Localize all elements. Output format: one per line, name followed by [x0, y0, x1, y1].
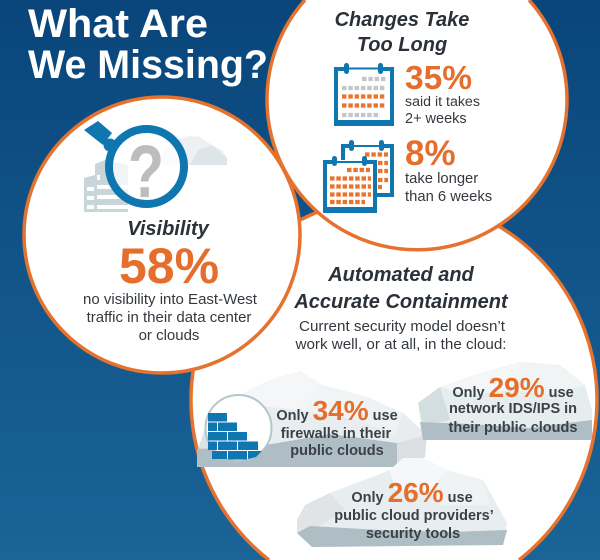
heading: automated: Automated and [327, 264, 475, 286]
text: security model: Current security model doesn’t [299, 318, 506, 335]
icon: magnifying glass [84, 121, 184, 214]
stat: 8 percent: than 6 weeks [405, 189, 492, 205]
text: provider tools stat: public cloud providers’ [334, 508, 494, 524]
heading: changes: Too Long [357, 34, 447, 56]
stat: 8 percent: take longer [405, 171, 478, 187]
icon: calendars [323, 140, 392, 213]
title: We Missing? [28, 43, 268, 87]
text: network IDS stat: network IDS/IPS in [449, 401, 577, 417]
heading: automated: Accurate Containment [293, 291, 509, 313]
text: visibility description: or clouds [139, 327, 199, 344]
cloud: firewalls [197, 371, 427, 467]
title [28, 2, 268, 87]
stat: 35 percent: said it takes [405, 94, 480, 110]
heading: automated [293, 264, 509, 313]
stat: 8 percent: 8% [405, 134, 456, 173]
cloud: provider tools [297, 458, 507, 547]
stat: 35 percent: 2+ weeks [405, 111, 467, 127]
text: security model [294, 318, 507, 353]
text: visibility description [83, 291, 258, 344]
text: firewalls stat: firewalls in their [281, 426, 392, 442]
text: firewalls stat: Only 34% use [276, 395, 398, 426]
stat: 8 percent [405, 134, 492, 205]
panel: changes take too long [267, 0, 567, 250]
text: firewalls stat: public clouds [290, 443, 384, 459]
stat: 35 percent [405, 60, 480, 127]
text: provider tools stat: security tools [366, 526, 460, 542]
text: visibility description: traffic in their data center [87, 309, 251, 326]
text: network IDS stat: their public clouds [449, 420, 577, 436]
icon: building [84, 160, 128, 212]
heading: visibility: Visibility [127, 218, 210, 240]
stat: 58 percent: 58% [119, 238, 219, 294]
panel: visibility [24, 97, 300, 373]
icon: brick wall [206, 395, 272, 461]
icon: magnifying glass: ? [128, 131, 164, 214]
cloud: network IDS [418, 362, 592, 440]
panel: automated containment [191, 197, 597, 560]
text: firewalls stat [276, 395, 398, 459]
icon: calendar [334, 63, 394, 126]
text: network IDS stat: Only 29% use [452, 372, 574, 403]
text: security model: work well, or at all, in the cloud: [294, 336, 507, 353]
icon: cloud [150, 136, 227, 165]
text: network IDS stat [449, 372, 577, 436]
heading: changes: Changes Take [335, 9, 469, 31]
text: visibility description: no visibility into East-West [83, 291, 258, 308]
stat: 35 percent: 35% [405, 60, 472, 97]
text: provider tools stat [334, 477, 494, 542]
text: provider tools stat: Only 26% use [351, 477, 473, 508]
heading: changes [335, 9, 469, 56]
title: What Are [28, 2, 208, 46]
